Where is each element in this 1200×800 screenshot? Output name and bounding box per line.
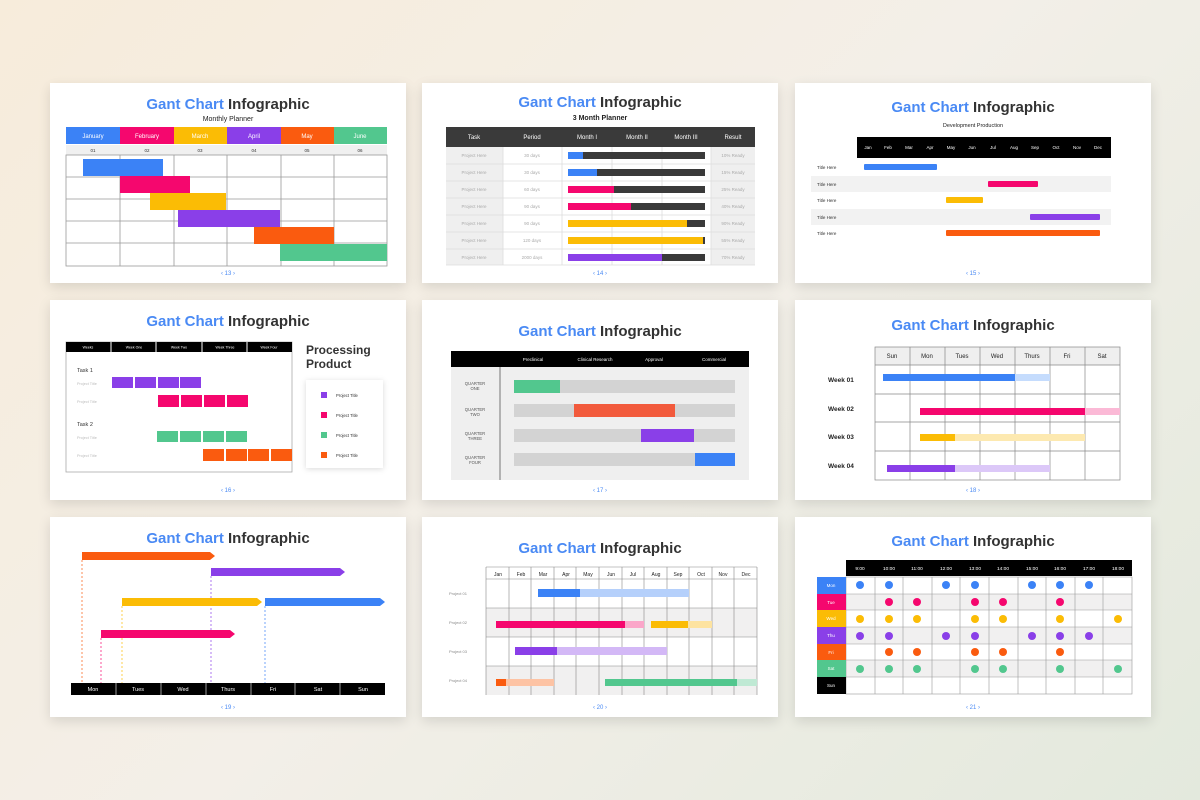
month grid: Jun xyxy=(607,572,615,578)
weekly table: Task 1 xyxy=(77,368,93,374)
timeline chart: Title Here xyxy=(817,198,837,203)
timeline chart: Jun xyxy=(968,145,976,150)
month header: 02 xyxy=(144,148,150,153)
title: Gant Chart Infographic xyxy=(518,540,682,557)
table: 90 days xyxy=(524,204,541,209)
month grid: Feb xyxy=(517,572,526,578)
title: Gant Chart Infographic xyxy=(518,94,682,111)
timeline chart: Title Here xyxy=(817,182,837,187)
quarter chart: THREE xyxy=(468,436,482,441)
month grid: Apr xyxy=(562,572,570,578)
panel: slide 15 development production xyxy=(795,83,1151,283)
timeline chart: Title Here xyxy=(817,215,837,220)
month grid: May xyxy=(583,572,593,578)
schedule table xyxy=(817,560,1132,694)
month grid: Jul xyxy=(630,572,636,578)
table: 15% Ready xyxy=(721,170,745,175)
weekly table: Project Title xyxy=(77,382,97,386)
month header: 06 xyxy=(357,148,363,153)
month header: April xyxy=(248,134,260,140)
day axis: Tues xyxy=(132,687,144,693)
month header: June xyxy=(353,134,367,140)
calendar grid: Week 03 xyxy=(828,434,854,441)
schedule table: 10:00 xyxy=(883,566,895,572)
subtitle: Monthly Planner xyxy=(203,116,254,123)
panel: slide 14 three month planner xyxy=(422,83,778,283)
timeline chart: Mar xyxy=(905,145,913,150)
table: 70% Ready xyxy=(721,255,745,260)
month grid: Project 04 xyxy=(449,678,468,683)
timeline chart: Title Here xyxy=(817,165,837,170)
schedule table: Wed xyxy=(826,616,836,621)
schedule table: 12:00 xyxy=(940,566,952,572)
month grid: Sep xyxy=(674,572,683,578)
quarter chart: QUARTER xyxy=(465,431,485,436)
schedule table: 14:00 xyxy=(997,566,1009,572)
month grid: Nov xyxy=(719,572,728,578)
panel: slide 15 development production: Development Production xyxy=(943,123,1003,129)
title: Gant Chart Infographic xyxy=(891,99,1055,116)
weekly table: Weeks xyxy=(83,346,94,350)
gantt bars xyxy=(83,159,387,261)
calendar grid: Wed xyxy=(991,354,1003,360)
quarter chart: Clinical Research xyxy=(577,357,613,362)
panel: slide 21 weekly schedule xyxy=(795,517,1151,717)
calendar grid xyxy=(828,347,1120,480)
weekly table xyxy=(66,342,292,472)
title: Gant Chart Infographic xyxy=(518,323,682,340)
quarter chart: Preclinical xyxy=(523,357,543,362)
calendar grid: Sat xyxy=(1097,354,1107,360)
panel: slide 19 arrow timeline: ‹ 19 › xyxy=(221,705,235,711)
table: 10% Ready xyxy=(721,153,745,158)
timeline chart: Oct xyxy=(1052,145,1060,150)
day axis: Sun xyxy=(358,687,368,693)
timeline chart: Apr xyxy=(926,145,934,150)
table: 30 days xyxy=(524,170,541,175)
month header: 01 xyxy=(90,148,96,153)
panel: slide 20 project timeline xyxy=(422,517,778,717)
panel: slide 15 development production: ‹ 15 › xyxy=(966,271,980,277)
heading: processing product: Product xyxy=(306,357,351,371)
title: Gant Chart Infographic xyxy=(891,533,1055,550)
timeline chart: Feb xyxy=(884,145,892,150)
panel: slide 17 quarters: ‹ 17 › xyxy=(593,488,607,494)
timeline chart: Jul xyxy=(990,145,996,150)
month header: February xyxy=(135,134,159,140)
timeline chart: Dec xyxy=(1094,145,1103,150)
calendar grid: Thurs xyxy=(1024,354,1040,360)
weekly table: Project Title xyxy=(77,400,97,404)
weekly table: Week Two xyxy=(171,346,187,350)
month grid: Project 03 xyxy=(449,649,468,654)
quarter chart xyxy=(451,351,749,480)
table: 90% Ready xyxy=(721,221,745,226)
day axis: Sat xyxy=(314,687,323,693)
calendar grid: Sun xyxy=(887,354,897,360)
quarter chart: QUARTER xyxy=(465,381,485,386)
schedule table: 16:00 xyxy=(1054,566,1066,572)
table: Month I xyxy=(577,135,597,141)
table: 60 days xyxy=(524,187,541,192)
table: Month II xyxy=(626,135,648,141)
legend card xyxy=(306,380,383,468)
quarter chart: ONE xyxy=(470,386,480,391)
calendar grid: Week 02 xyxy=(828,406,854,413)
timeline chart: Sep xyxy=(1031,145,1039,150)
legend card: Project Title xyxy=(336,413,359,418)
legend card: Project Title xyxy=(336,453,359,458)
panel: slide 20 project timeline: ‹ 20 › xyxy=(593,705,607,711)
month header: 04 xyxy=(251,148,257,153)
table: 120 days xyxy=(523,238,542,243)
month grid xyxy=(449,567,757,695)
arrow bars xyxy=(82,552,385,638)
table: Task xyxy=(468,135,481,141)
panel: slide 18 calendar xyxy=(795,300,1151,500)
timeline chart: Aug xyxy=(1010,145,1018,150)
schedule table: Thu xyxy=(827,633,835,638)
calendar grid: Tues xyxy=(955,354,969,360)
panel: slide 13 monthly planner xyxy=(50,83,406,283)
month header: March xyxy=(192,134,208,140)
title: Gant Chart Infographic xyxy=(146,96,310,113)
panel: slide 19 arrow timeline xyxy=(50,517,406,717)
panel: slide 17 quarters xyxy=(422,300,778,500)
schedule table: 9:00 xyxy=(855,566,865,572)
panel: slide 13 monthly planner: ‹ 13 › xyxy=(221,271,235,277)
month grid: Project 02 xyxy=(449,620,468,625)
table: Result xyxy=(724,135,742,141)
month header xyxy=(66,127,387,155)
table: Project Here xyxy=(461,204,487,209)
panel: slide 14 three month planner: 3 Month Planner xyxy=(573,115,627,122)
table: Month III xyxy=(674,135,698,141)
weekly table: Project Title xyxy=(77,454,97,458)
table: Project Here xyxy=(461,255,487,260)
timeline chart: Jan xyxy=(864,145,872,150)
schedule table: Sat xyxy=(828,666,835,671)
schedule table: 17:00 xyxy=(1083,566,1095,572)
table: Project Here xyxy=(461,170,487,175)
schedule table: 11:00 xyxy=(911,566,923,572)
weekly table: Week Three xyxy=(216,346,235,350)
quarter chart: QUARTER xyxy=(465,407,485,412)
schedule table: Tue xyxy=(827,600,835,605)
calendar grid: Mon xyxy=(921,354,933,360)
quarter chart: Commercial xyxy=(702,357,726,362)
schedule table: 15:00 xyxy=(1026,566,1038,572)
month grid: Project 01 xyxy=(449,591,468,596)
panel: slide 14 three month planner: ‹ 14 › xyxy=(593,271,607,277)
table: Project Here xyxy=(461,187,487,192)
heading: processing product: Processing xyxy=(306,343,371,357)
month header: 03 xyxy=(197,148,203,153)
month header: January xyxy=(82,134,104,140)
day axis: Fri xyxy=(270,687,276,693)
month grid: Dec xyxy=(742,572,751,578)
schedule table: Sun xyxy=(827,683,835,688)
month header: May xyxy=(301,134,313,140)
calendar grid: Week 04 xyxy=(828,463,854,470)
table: 25% Ready xyxy=(721,187,745,192)
day axis: Mon xyxy=(88,687,98,693)
weekly table: Week One xyxy=(126,346,142,350)
table: Project Here xyxy=(461,221,487,226)
title: Gant Chart Infographic xyxy=(146,530,310,547)
table: 90 days xyxy=(524,221,541,226)
weekly table: Project Title xyxy=(77,436,97,440)
panel: slide 16 processing product xyxy=(50,300,406,500)
timeline chart: Nov xyxy=(1073,145,1082,150)
table: Project Here xyxy=(461,238,487,243)
table: 40% Ready xyxy=(721,204,745,209)
table: 55% Ready xyxy=(721,238,745,243)
month header: 05 xyxy=(304,148,310,153)
calendar grid: Week 01 xyxy=(828,377,854,384)
month grid: Jan xyxy=(494,572,502,578)
schedule table: Fri xyxy=(828,650,834,655)
legend card: Project Title xyxy=(336,393,359,398)
quarter chart: TWO xyxy=(470,412,481,417)
quarter chart: QUARTER xyxy=(465,455,485,460)
calendar grid: Fri xyxy=(1064,354,1070,360)
title: Gant Chart Infographic xyxy=(891,317,1055,334)
day axis xyxy=(71,683,385,695)
day axis: Thurs xyxy=(221,687,235,693)
weekly table: Week Four xyxy=(260,346,278,350)
month grid: Aug xyxy=(652,572,661,578)
panel: slide 21 weekly schedule: ‹ 21 › xyxy=(966,705,980,711)
table: 30 days xyxy=(524,153,541,158)
timeline chart xyxy=(811,137,1111,236)
table: Period xyxy=(523,135,541,141)
table: 2000 days xyxy=(522,255,543,260)
quarter chart: Approval xyxy=(645,357,663,362)
schedule table: 13:00 xyxy=(969,566,981,572)
table: Project Here xyxy=(461,153,487,158)
panel: slide 18 calendar: ‹ 18 › xyxy=(966,488,980,494)
day axis: Wed xyxy=(177,687,189,693)
weekly table: Task 2 xyxy=(77,422,93,428)
title: Gant Chart Infographic xyxy=(146,313,310,330)
month grid: Mar xyxy=(539,572,548,578)
timeline chart: May xyxy=(947,145,956,150)
panel: slide 16 processing product: ‹ 16 › xyxy=(221,488,235,494)
dashed guides xyxy=(82,560,265,683)
timeline chart: Title Here xyxy=(817,231,837,236)
month grid: Oct xyxy=(697,572,705,578)
table xyxy=(446,127,755,265)
schedule table: 18:00 xyxy=(1112,566,1124,572)
legend card: Project Title xyxy=(336,433,359,438)
schedule table: Mon xyxy=(827,583,836,588)
quarter chart: FOUR xyxy=(469,460,481,465)
